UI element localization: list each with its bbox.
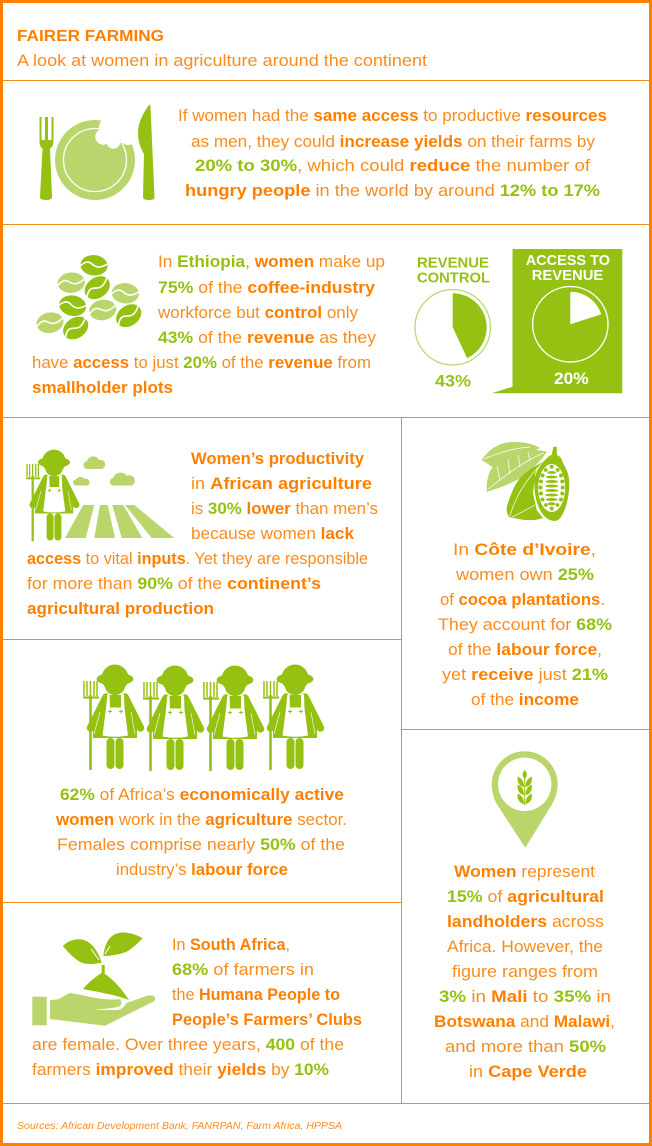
text block: 3% in Mali to 35% in — [439, 988, 611, 1006]
icon: four farmers — [83, 664, 320, 771]
text block: is 30% lower than men’s — [191, 500, 378, 518]
text block: In Ethiopia, women make up — [158, 253, 385, 271]
text block: workforce but control only — [157, 304, 359, 322]
panel: agricultural landholders — [402, 730, 649, 1103]
panel: Côte d'Ivoire cocoa — [402, 418, 649, 729]
text block: Women represent — [454, 863, 595, 881]
text block: access to vital inputs. Yet they are responsible — [27, 550, 368, 568]
text block: because women lack — [191, 525, 355, 543]
text block: the Humana People to — [172, 986, 340, 1004]
text block — [32, 936, 362, 1079]
text block — [178, 107, 607, 200]
text block — [55, 786, 347, 879]
text block — [438, 541, 612, 709]
text block: 43% of the revenue as they — [158, 329, 377, 347]
icon: map pin with wheat — [492, 751, 558, 848]
text block: women work in the agriculture sector. — [55, 811, 347, 829]
text block: figure ranges from — [452, 963, 598, 981]
icon: hand holding seedling — [32, 933, 155, 1026]
text block: have access to just 20% of the revenue from — [32, 354, 371, 372]
panel: equal access and yields — [3, 81, 649, 224]
text block: of cocoa plantations. — [440, 591, 605, 609]
text block: They account for 68% — [438, 616, 612, 634]
title: FAIRER FARMING — [17, 28, 164, 45]
text block: farmers improved their yields by 10% — [32, 1061, 329, 1079]
text block: 15% of agricultural — [447, 888, 604, 906]
panel: economically active women — [3, 640, 401, 902]
text block: If women had the same access to productive resources — [178, 107, 607, 125]
panel: women's productivity — [3, 418, 401, 639]
text block: 62% of Africa’s economically active — [60, 786, 344, 804]
text block: Women’s productivity — [191, 450, 365, 468]
pie chart: revenue control 43%: 43% — [435, 373, 471, 391]
text block: of the labour force , — [448, 641, 602, 659]
text block: as men, they could increase yields on their farms by — [191, 133, 596, 151]
text block: landholders across — [447, 913, 604, 931]
text block: and more than 50% — [445, 1038, 606, 1056]
icon: cocoa pod and leaves — [482, 442, 569, 521]
text block: in African agriculture — [191, 475, 372, 493]
subtitle: A look at women in agriculture around the continent — [17, 52, 427, 70]
icon: coffee beans — [34, 254, 146, 344]
text block: for more than 90% of the continent’s — [27, 575, 321, 593]
pie chart: access to revenue 20%: REVENUE — [532, 267, 603, 284]
pie chart: revenue control 43% — [415, 255, 490, 391]
pie chart: access to revenue 20%: ACCESS TO — [526, 252, 610, 269]
pie chart: revenue control 43%: CONTROL — [417, 270, 490, 287]
panel: South Africa — [3, 903, 401, 1103]
icon: farmer in field with clouds — [26, 450, 174, 541]
text block: People’s Farmers’ Clubs — [172, 1011, 362, 1029]
text block: industry’s labour force — [116, 861, 288, 879]
pie chart: revenue control 43%: REVENUE — [417, 255, 489, 272]
text block: yet receive just 21% — [442, 666, 608, 684]
text block: women own 25% — [455, 566, 594, 584]
text block: 20% to 30% , which could reduce the number of — [195, 157, 590, 175]
text block: are female. Over three years, 400 of the — [32, 1036, 344, 1054]
text block: of the income — [471, 691, 579, 709]
text block: 75% of the coffee-industry — [158, 279, 376, 297]
pie chart: access to revenue 20%: 20% — [554, 370, 589, 388]
text block — [27, 450, 378, 618]
text block: Botswana and Malawi, — [434, 1013, 615, 1031]
text block: hungry people in the world by around 12% to 17% — [185, 182, 600, 200]
text block: In Côte d’Ivoire , — [453, 541, 596, 559]
text block — [434, 863, 615, 1081]
pie chart: access to revenue 20% — [492, 249, 622, 393]
text block: Females comprise nearly 50% of the — [57, 836, 345, 854]
text block: Africa. However, the — [447, 938, 603, 956]
sources note: Sources: African Development Bank, FANRPAN, Farm Africa, HPPSA — [17, 1120, 342, 1132]
panel: Ethiopia coffee — [3, 225, 649, 417]
text block: agricultural production — [27, 600, 214, 618]
text block: in Cape Verde — [469, 1063, 587, 1081]
text block: smallholder plots — [32, 379, 173, 397]
text block: 68% of farmers in — [172, 961, 314, 979]
header: title and subtitle — [17, 28, 427, 70]
icon: plate, fork and knife — [40, 105, 155, 200]
text block: In South Africa, — [172, 936, 290, 954]
text block — [32, 253, 385, 397]
